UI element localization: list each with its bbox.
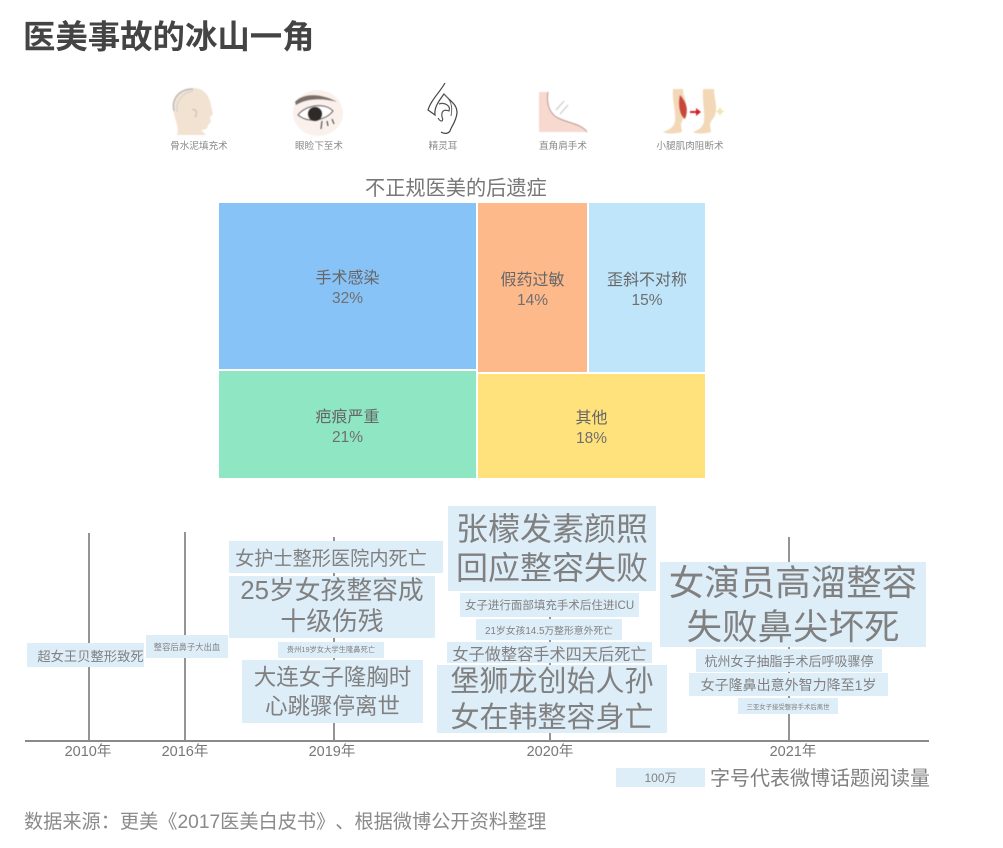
year 2020: 2020年 [527, 744, 573, 760]
topic 2021 rhinoplasty [689, 673, 888, 696]
topic 2019 nurse [229, 541, 443, 573]
stems 2019 [333, 537, 335, 741]
icon: elf ear [427, 82, 458, 134]
cell: other: 18% [576, 430, 607, 447]
cell: scars [219, 371, 476, 478]
topic 2021 Sanya [738, 698, 838, 714]
topic 2020 ICU [460, 593, 639, 617]
year 2010: 2010年 [65, 744, 111, 760]
source note: 数据来源：更美《2017医美白皮书》、根据微博公开资料整理 [24, 812, 546, 833]
cell: scars: 21% [332, 428, 363, 446]
topic 2019 25-year-old: 十级伤残 [280, 608, 384, 636]
topic 2010: 超女王贝整形致死 [37, 648, 144, 664]
topic 2020 Baoshilong: 堡狮龙创始人孙 [450, 666, 654, 698]
cell: fake drug allergy [478, 203, 587, 372]
cell: fake drug allergy: 14% [517, 292, 548, 308]
topic 2021 rhinoplasty: 女子隆鼻出意外智力降至1岁 [701, 676, 876, 692]
treemap chart [219, 203, 705, 478]
icon: right-angle shoulder [538, 92, 588, 133]
year 2019: 2019年 [309, 744, 355, 760]
topic 2020 ICU: 女子进行面部填充手术后住进ICU [465, 600, 634, 612]
topic 2019 Dalian: 大连女子隆胸时 [254, 664, 411, 690]
icon label: eyelid: 眼睑下至术 [295, 141, 343, 152]
topic 2019 nurse: 女护士整形医院内死亡 [235, 549, 427, 570]
topic 2020 four days: 女子做整容手术四天后死亡 [452, 646, 647, 664]
topic 2020 Zhang Meng [448, 506, 656, 591]
legend text: 字号代表微博话题阅读量 [710, 768, 930, 790]
icon label: bone cement: 骨水泥填充术 [170, 141, 228, 152]
year 2021: 2021年 [770, 744, 816, 760]
legend swatch: 100万 [644, 771, 677, 785]
topic 2020 Baoshilong: 女在韩整容身亡 [450, 702, 654, 734]
topic 2021 Gao Liu [660, 562, 926, 647]
icon label: calf: 小腿肌肉阻断术 [656, 141, 724, 152]
topic 2021 Sanya: 三亚女子接受整容手术后离世 [746, 704, 830, 710]
cell: surgical infection: 32% [332, 290, 363, 307]
topic 2021 Gao Liu: 女演员高溜整容 [669, 562, 917, 602]
stems 2010 [88, 533, 90, 741]
topic 2021 Hangzhou [696, 649, 882, 672]
cell: surgical infection [219, 203, 476, 369]
icon: eye [293, 90, 343, 136]
topic 2020 Zhang Meng: 回应整容失败 [456, 550, 648, 586]
topic 2019 25-year-old: 25岁女孩整容成 [240, 577, 424, 605]
stems 2016 [184, 532, 186, 741]
topic 2019 Dalian [242, 660, 423, 723]
topic 2016 [146, 635, 228, 658]
topic 2019 Guizhou: 贵州19岁女大学生隆鼻死亡 [287, 645, 375, 654]
treemap heading: 不正规医美的后遗症 [365, 178, 547, 200]
topic 2021 Gao Liu: 失败鼻尖坏死 [686, 606, 900, 646]
topic 2019 25-year-old [229, 576, 435, 638]
topic 2019 Dalian: 心跳骤停离世 [265, 694, 400, 718]
stems 2021 [788, 537, 790, 741]
stems 2020 [549, 600, 551, 741]
cell: asymmetry: 歪斜不对称 [607, 272, 687, 288]
cell: surgical infection: 手术感染 [315, 270, 380, 287]
icon label: elf ear: 精灵耳 [429, 141, 457, 152]
icon: head with bone cement filler [172, 88, 214, 136]
icon label: shoulder: 直角肩手术 [539, 141, 587, 152]
year 2016: 2016年 [162, 744, 208, 760]
cell: asymmetry [589, 203, 705, 372]
topic 2016: 整容后鼻子大出血 [154, 642, 220, 652]
topic 2020 Zhang Meng: 张檬发素颜照 [456, 510, 648, 546]
icon: calf muscle surgery [663, 88, 724, 134]
cell: asymmetry: 15% [631, 292, 663, 308]
topic 2020 Baoshilong [437, 665, 667, 733]
cell: scars: 疤痕严重 [315, 408, 380, 426]
topic 2010 [27, 643, 144, 667]
topic 2019 Guizhou [278, 642, 384, 658]
topic 2020 21-year-old: 21岁女孩14.5万整形意外死亡 [485, 626, 613, 636]
legend swatch [616, 768, 705, 787]
cell: other: 其他 [575, 410, 608, 427]
cell: fake drug allergy: 假药过敏 [500, 272, 564, 288]
timeline chart [25, 506, 929, 760]
topic 2021 Hangzhou: 杭州女子抽脂手术后呼吸骤停 [704, 654, 874, 669]
cell: other [478, 374, 705, 478]
time axis [25, 740, 929, 742]
title: 医美事故的冰山一角 [23, 19, 315, 55]
topic 2020 21-year-old [476, 619, 622, 640]
